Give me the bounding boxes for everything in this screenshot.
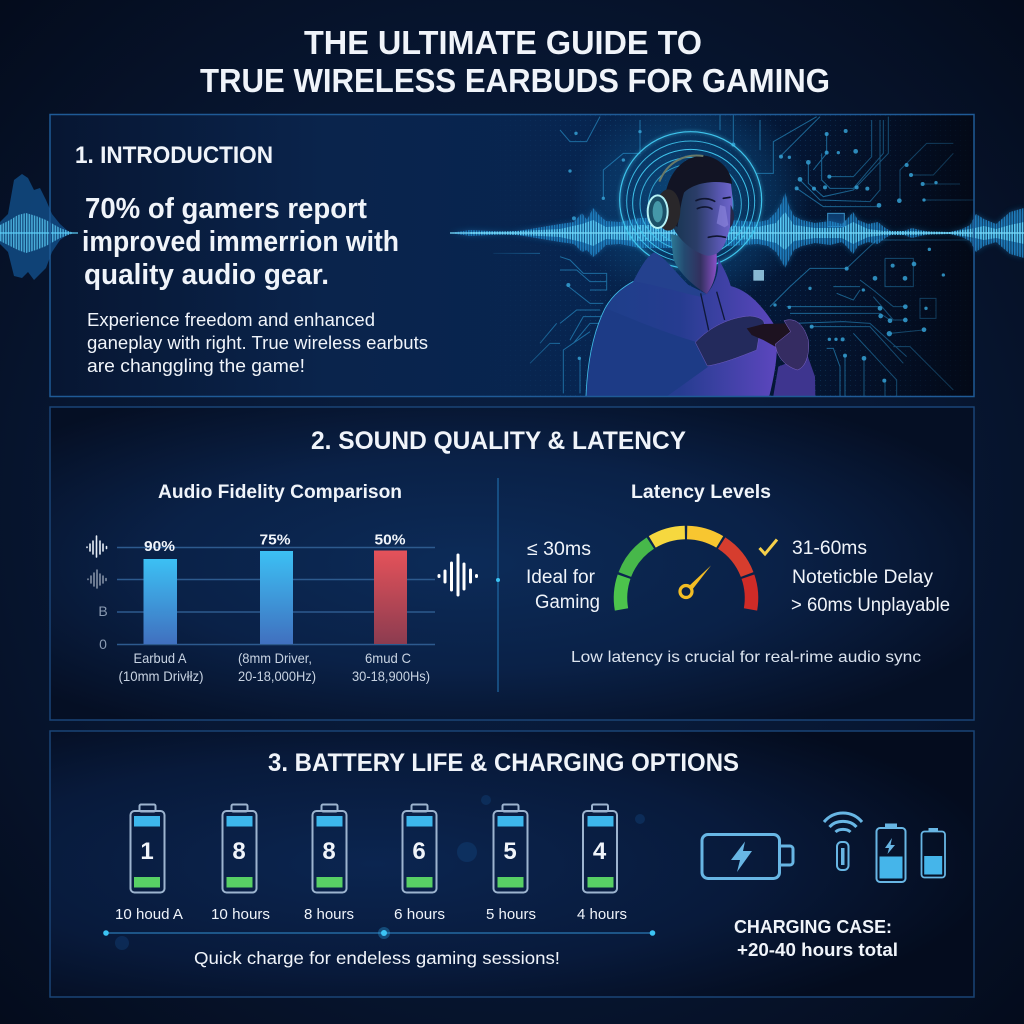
title: THE ULTIMATE GUIDE TO: [304, 24, 702, 61]
latency note: Low latency is crucial for real-rime audio sync: [571, 649, 921, 666]
charging case text: +20-40 hours total: [737, 940, 898, 960]
stat headline: [82, 193, 399, 291]
battery 3: 8 hours: [304, 906, 354, 923]
left latency text: Gaming: [535, 592, 600, 613]
decorative bokeh: [115, 795, 645, 950]
panel border: introduction: [50, 114, 974, 396]
bar labels: 20-18,000Hz): [238, 668, 316, 684]
charging case text: [734, 917, 898, 960]
nose highlight: [717, 205, 728, 227]
illustration: circuit board background: [494, 115, 974, 396]
battery 5: 5 hours: [486, 906, 536, 923]
bar A: 90%: [144, 539, 175, 555]
bar A: [144, 539, 177, 644]
bar labels: (8mm Driver,: [238, 650, 312, 666]
bar labels: (10mm Drivłłz): [118, 668, 204, 684]
hoodie strings: [701, 292, 725, 333]
right latency text: > 60ms Unplayable: [791, 595, 950, 616]
hood shadow: [633, 253, 707, 297]
bar C: [374, 532, 407, 644]
divider: [496, 478, 500, 692]
face: [673, 181, 733, 256]
right latency text: [791, 538, 950, 616]
sleeve rim light: [586, 281, 633, 396]
decorative waveform: left outside panel: [0, 174, 78, 280]
left latency text: ≤ 30ms: [527, 539, 591, 560]
battery 2: 8: [232, 838, 246, 865]
icon: small battery: [922, 828, 945, 878]
battery 2: 10 hours: [211, 906, 270, 923]
intro body text: ganeplay with right. True wireless earbuts: [87, 333, 428, 353]
bar B: [260, 532, 293, 644]
intro body text: [87, 310, 428, 376]
left latency text: [526, 539, 600, 613]
title: [200, 24, 830, 99]
panel: battery life and charging: [50, 731, 974, 997]
battery 3: 8: [322, 838, 336, 865]
axis labels: 0: [99, 636, 107, 652]
battery 2: [211, 804, 270, 923]
battery 3: [304, 804, 354, 923]
stat headline: improved immerrion with: [82, 226, 399, 258]
battery 6: [577, 804, 627, 923]
decorative waveform: center to right: [450, 192, 1024, 268]
battery 4: [394, 804, 445, 923]
bar B: 75%: [260, 532, 291, 548]
facial features: [696, 197, 730, 237]
gauge: latency levels: [526, 482, 950, 666]
intro body text: are changgling the game!: [87, 356, 305, 376]
battery 5: 5: [503, 838, 517, 865]
quick charge note: Quick charge for endeless gaming sessions!: [194, 948, 560, 968]
stat headline: quality audio gear.: [84, 259, 329, 291]
axis labels: [98, 603, 108, 652]
battery 6: 4 hours: [577, 906, 627, 923]
bar labels: 30-18,900Hs): [352, 668, 430, 684]
hair: [664, 155, 732, 227]
sleeve left: [586, 308, 708, 396]
icon: sound wave: [439, 555, 476, 595]
bar C: 50%: [374, 532, 406, 548]
illustration: gamer wearing headphones: [586, 132, 815, 396]
title: TRUE WIRELESS EARBUDS FOR GAMING: [200, 62, 830, 99]
right latency text: 31-60ms: [792, 538, 867, 559]
hand left: [695, 316, 764, 366]
battery 4: 6: [412, 838, 426, 865]
icon: check mark: [760, 540, 777, 554]
timeline: [103, 927, 655, 939]
battery 5: [486, 804, 536, 923]
heading: introduction: 1. INTRODUCTION: [75, 142, 273, 169]
intro body text: Experience freedom and enhanced: [87, 310, 375, 330]
bar labels: 6mud C: [365, 650, 411, 666]
charging case text: CHARGING CASE:: [734, 917, 892, 937]
sleeve right: [773, 355, 815, 396]
controller: [747, 323, 795, 348]
heading: battery life: 3. BATTERY LIFE & CHARGING OPTIONS: [268, 749, 739, 777]
heading: sound quality: 2. SOUND QUALITY & LATENCY: [311, 427, 686, 455]
icon: battery half charged: [876, 824, 906, 882]
battery 6: 4: [593, 838, 607, 865]
axis icons: [87, 536, 106, 588]
bar chart: audio fidelity: Audio Fidelity Comparison: [158, 482, 402, 503]
icon: wireless earbud: [824, 813, 862, 870]
icon: charging battery: [702, 834, 793, 878]
gauge needle: [680, 566, 711, 598]
battery 4: 6 hours: [394, 906, 445, 923]
hoodie body: [593, 253, 777, 396]
headphones: [659, 156, 703, 182]
hand right: [775, 320, 809, 370]
neck: [671, 234, 717, 294]
panel: introduction: [0, 90, 1024, 397]
battery 1: 10 houd A: [115, 906, 183, 923]
battery 1: 1: [140, 838, 154, 865]
bar labels: [118, 650, 430, 684]
right latency text: Noteticble Delay: [792, 567, 934, 588]
sound rings around head: [620, 132, 762, 268]
battery 1: [115, 804, 183, 923]
gauge: latency levels: Latency Levels: [631, 482, 771, 503]
stat headline: 70% of gamers report: [85, 193, 367, 225]
left latency text: Ideal for: [526, 567, 596, 588]
gauge arc: [621, 532, 751, 609]
axis labels: B: [98, 603, 108, 619]
bar labels: Earbud A: [134, 650, 187, 666]
bar chart: audio fidelity: [87, 482, 435, 684]
panel: sound quality and latency: [50, 407, 974, 720]
